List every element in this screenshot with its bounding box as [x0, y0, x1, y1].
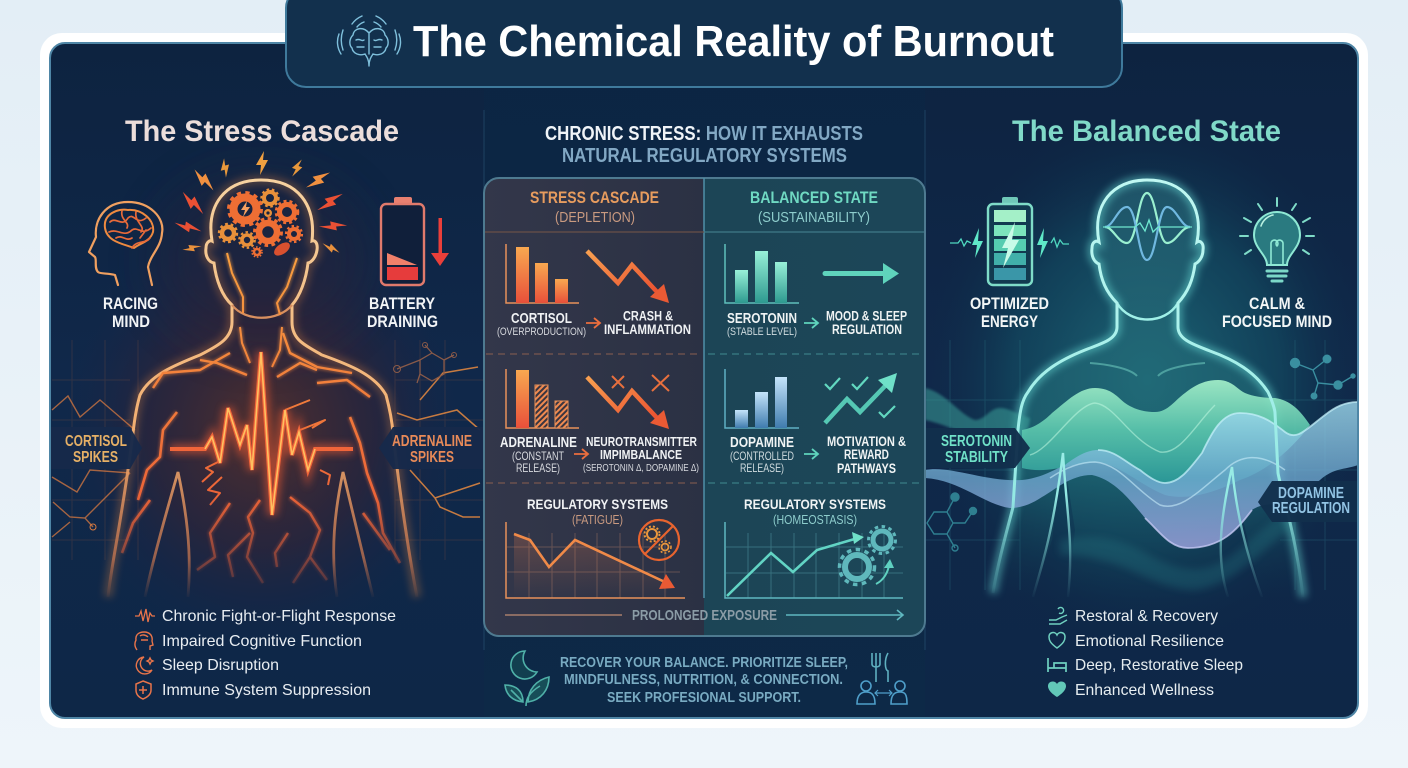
icon: lightning bolts around head	[173, 151, 348, 255]
label: regulatory systems homeostasis	[744, 496, 886, 527]
label: battery draining: BATTERY	[369, 295, 435, 313]
right panel: the balanced state	[925, 180, 1358, 699]
icon: fork knife and people	[857, 653, 907, 704]
label: dopamine: (CONTROLLED	[730, 449, 794, 463]
list: balanced benefits	[1048, 607, 1243, 699]
arrow: adrenaline to imbalance	[574, 449, 588, 459]
tag: cortisol spikes	[66, 427, 142, 469]
label: neurotransmitter imbalance: NEUROTRANSMITTER	[586, 434, 697, 449]
label: serotonin: SEROTONIN	[727, 311, 797, 327]
label: motivation and reward pathways: REWARD	[844, 447, 889, 462]
wave: serotonin green	[925, 380, 1310, 497]
recovery message: RECOVER YOUR BALANCE. PRIORITIZE SLEEP,	[560, 655, 848, 671]
icon: sleep moon	[136, 657, 153, 674]
text: resilience: Emotional Resilience	[1075, 633, 1224, 650]
text: sleep: Sleep Disruption	[162, 657, 279, 674]
bar chart: adrenaline	[506, 369, 579, 428]
label: motivation and reward pathways: MOTIVATION &	[827, 434, 906, 449]
column header: stress cascade	[530, 188, 659, 226]
wave: faint lower ribbon	[1059, 522, 1286, 591]
icon: no gears	[639, 520, 679, 560]
icon: gears homeostasis	[840, 526, 896, 584]
icon: immune shield	[136, 681, 151, 699]
column header: stress cascade: (DEPLETION)	[555, 209, 635, 226]
label: calm and focused mind: FOCUSED MIND	[1222, 313, 1332, 331]
label: motivation and reward pathways	[827, 434, 906, 476]
label: regulatory systems homeostasis: (HOMEOSTASIS)	[773, 512, 857, 527]
label: racing mind: MIND	[112, 313, 150, 331]
label: mood and sleep regulation	[826, 308, 907, 337]
column header: balanced state	[750, 188, 878, 226]
icon: brain with signal arcs	[337, 16, 401, 66]
tag: adrenaline spikes	[379, 427, 484, 469]
label: cortisol: CORTISOL	[511, 311, 572, 327]
column header: balanced state: BALANCED STATE	[750, 188, 878, 207]
text: recovery: Restoral & Recovery	[1075, 608, 1218, 625]
icon: optimized battery	[950, 197, 1069, 285]
tag: dopamine regulation	[1258, 481, 1358, 522]
label: dopamine	[730, 435, 794, 475]
comparison table	[484, 178, 925, 636]
bar chart: dopamine	[725, 369, 799, 428]
tag: cortisol spikes: CORTISOL	[65, 433, 127, 450]
line chart: homeostasis	[725, 522, 903, 598]
bar chart: serotonin	[725, 244, 799, 303]
label: cortisol: (OVERPRODUCTION)	[497, 326, 586, 338]
tag: serotonin stability	[941, 428, 1030, 468]
text: cognitive: Impaired Cognitive Function	[162, 633, 362, 650]
icon: cognitive	[135, 632, 153, 650]
center heading	[545, 123, 863, 167]
prolonged exposure timeline	[505, 607, 903, 624]
tag: adrenaline spikes: ADRENALINE	[392, 433, 472, 450]
icon: fight or flight	[135, 609, 155, 622]
nerve cracks	[122, 253, 400, 583]
arrow: cortisol crash	[587, 251, 669, 303]
recovery message	[560, 655, 848, 706]
label: regulatory systems fatigue: (FATIGUE)	[572, 512, 623, 527]
title banner	[286, 0, 1122, 87]
label: regulatory systems homeostasis: REGULATORY SYSTEMS	[744, 496, 886, 512]
arrow: neurotransmitter decline	[587, 375, 669, 429]
label: serotonin	[727, 311, 797, 338]
label: regulatory systems fatigue	[527, 496, 668, 527]
label: neurotransmitter imbalance	[583, 434, 699, 474]
label: racing mind: RACING	[103, 295, 158, 313]
tag: adrenaline spikes: SPIKES	[410, 449, 454, 466]
heading: the stress cascade: The Stress Cascade	[125, 115, 399, 148]
wave: dopamine blue	[925, 402, 1358, 548]
tag: dopamine regulation: REGULATION	[1272, 500, 1350, 517]
label: racing mind	[104, 298, 158, 327]
label: adrenaline: ADRENALINE	[500, 435, 577, 451]
ECG heartbeat glow	[170, 352, 353, 515]
arrow: motivation rising with checks	[825, 373, 897, 423]
recovery message: MINDFULNESS, NUTRITION, & CONNECTION.	[564, 672, 843, 688]
icon: racing mind head	[89, 202, 162, 285]
column header: balanced state: (SUSTAINABILITY)	[758, 209, 870, 226]
label: battery draining	[368, 298, 438, 327]
prolonged exposure timeline: PROLONGED EXPOSURE	[632, 607, 777, 624]
icon: bed	[1048, 658, 1066, 672]
icon: heart outline	[1049, 633, 1065, 648]
label: dopamine: RELEASE)	[740, 461, 784, 475]
label: mood and sleep regulation: MOOD & SLEEP	[826, 308, 907, 324]
label: optimized energy: OPTIMIZED	[970, 295, 1049, 313]
left panel: the stress cascade	[51, 151, 484, 699]
arrow: cortisol to crash	[586, 318, 600, 328]
recovery message: SEEK PROFESIONAL SUPPORT.	[607, 690, 801, 706]
text: sleep: Deep, Restorative Sleep	[1075, 657, 1243, 674]
arrow: steady	[825, 263, 899, 284]
label: battery draining: DRAINING	[367, 313, 438, 331]
label: calm and focused mind	[1222, 298, 1332, 327]
list: stress symptoms	[135, 608, 396, 699]
title text: The Chemical Reality of Burnout	[413, 17, 1054, 66]
label: calm and focused mind: CALM &	[1249, 295, 1305, 313]
label: adrenaline: (CONSTANT	[512, 449, 565, 463]
label: optimized energy	[970, 298, 1048, 327]
text: fight or flight: Chronic Fight-or-Flight Response	[162, 608, 396, 625]
text: wellness: Enhanced Wellness	[1075, 682, 1214, 699]
arrow: dopamine to motivation	[804, 449, 818, 459]
bar chart: cortisol	[506, 244, 579, 303]
text: immune: Immune System Suppression	[162, 682, 371, 699]
column header: stress cascade: STRESS CASCADE	[530, 188, 659, 207]
brain wave in head	[1103, 193, 1192, 260]
background grid	[925, 340, 1358, 590]
label: neurotransmitter imbalance: IMPIMBALANCE	[600, 447, 682, 462]
molecules	[927, 355, 1355, 551]
line chart: fatigue	[506, 522, 685, 598]
balanced body silhouette	[993, 180, 1303, 597]
heading: the balanced state: The Balanced State	[1012, 115, 1281, 148]
label: crash and inflammation	[604, 308, 691, 337]
label: adrenaline	[500, 435, 577, 475]
label: regulatory systems fatigue: REGULATORY SYSTEMS	[527, 496, 668, 512]
label: adrenaline: RELEASE)	[516, 461, 560, 475]
tag: dopamine regulation: DOPAMINE	[1278, 485, 1344, 502]
tag: serotonin stability: STABILITY	[945, 449, 1009, 466]
icon: recovery hand	[1049, 607, 1067, 624]
icon: moon and leaves	[505, 651, 549, 706]
label: crash and inflammation: INFLAMMATION	[604, 322, 691, 337]
icon: gears in head	[219, 190, 302, 258]
tag: cortisol spikes: SPIKES	[73, 449, 118, 466]
label: cortisol	[497, 311, 586, 338]
label: motivation and reward pathways: PATHWAYS	[837, 461, 896, 476]
center heading: CHRONIC STRESS: HOW IT EXHAUSTS	[545, 123, 863, 145]
stressed body silhouette	[108, 180, 417, 597]
arms re-stroked over waves	[993, 180, 1303, 597]
label: serotonin: (STABLE LEVEL)	[727, 326, 797, 338]
footer recovery text	[505, 651, 907, 706]
tag: serotonin stability: SEROTONIN	[941, 433, 1012, 450]
icon: light bulb	[1240, 198, 1314, 281]
label: neurotransmitter imbalance: (SEROTONIN Δ, DOPAMINE Δ)	[583, 463, 699, 474]
label: crash and inflammation: CRASH &	[623, 308, 673, 324]
background grid and zigzag lines	[52, 340, 484, 560]
center heading: NATURAL REGULATORY SYSTEMS	[562, 145, 847, 167]
icon: heart filled	[1048, 682, 1066, 697]
label: optimized energy: ENERGY	[981, 313, 1038, 331]
arrow: serotonin to mood	[804, 318, 818, 328]
icon: draining battery	[381, 197, 449, 285]
label: dopamine: DOPAMINE	[730, 435, 794, 451]
label: mood and sleep regulation: REGULATION	[832, 322, 902, 337]
